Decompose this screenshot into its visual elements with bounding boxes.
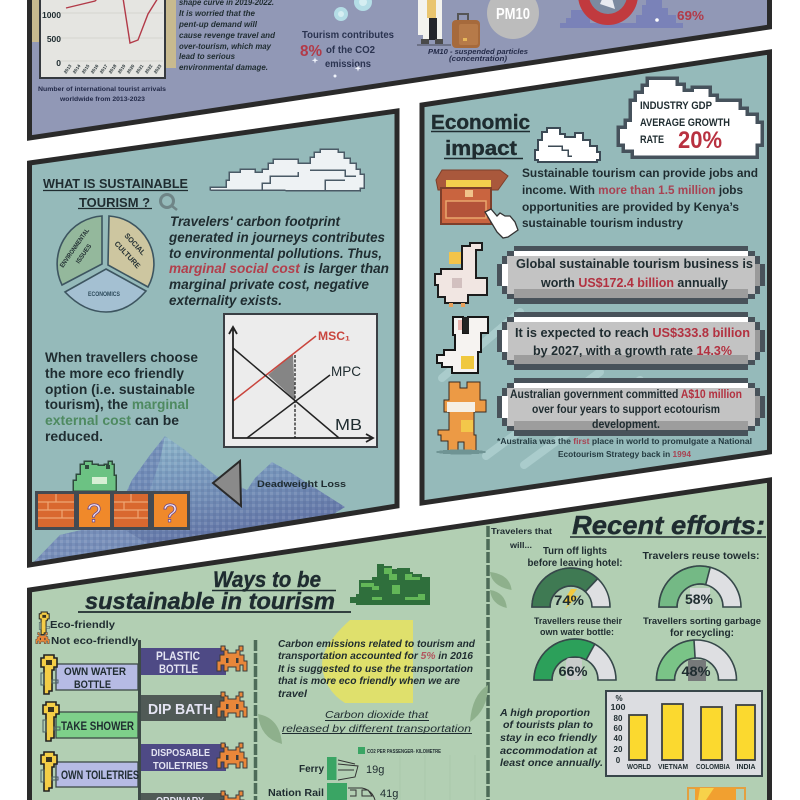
text: eco friendly accommodation bbox=[499, 707, 603, 769]
text: revenge travel warning: pent-up demand will bbox=[178, 19, 258, 29]
icon: green bush bbox=[350, 564, 430, 605]
heading: ways to be sustainable in tourism: Ways to be bbox=[213, 567, 321, 592]
heading: ways to be sustainable in tourism: sustainable in tourism bbox=[85, 588, 335, 614]
pie: environmental, social, economic pillars: CULTURE bbox=[113, 239, 142, 270]
icon: pixel rabbit bbox=[437, 317, 488, 373]
line chart: international tourist arrivals: 1000 bbox=[42, 10, 61, 20]
gauge: turn off lights 74 percent: Turn off lights bbox=[543, 546, 607, 557]
PM10 circle bbox=[487, 0, 539, 39]
text: carbon footprint explanation: generated in journeys contributes bbox=[168, 230, 385, 245]
panel: economic impact bbox=[422, 52, 770, 503]
pill: expected growth: by 2027, with a growth rate 14.3% bbox=[533, 343, 732, 358]
pill: global business worth: Global sustainable tourism business is bbox=[516, 257, 753, 271]
chart title: carbon dioxide by transportation: Carbon dioxide that bbox=[325, 709, 429, 721]
pill: global business worth bbox=[497, 246, 765, 304]
heading bbox=[431, 112, 530, 160]
PM10 caption: (concentration) bbox=[449, 54, 508, 63]
panel: ways to be sustainable and recent efforts bbox=[30, 480, 770, 800]
text: eco friendly accommodation: of tourists plan to bbox=[503, 719, 594, 731]
gauge: turn off lights 74 percent: 74% bbox=[554, 592, 585, 608]
gauge: reuse water bottle 66 percent: own water bottle: bbox=[540, 627, 614, 638]
stat: tourism contributes 8 percent of CO2: Tourism contributes bbox=[302, 30, 394, 41]
icon: magnifier bbox=[160, 194, 177, 210]
bar chart: plan to stay in eco accommodation by country: 80 bbox=[614, 714, 623, 723]
chart: deadweight loss supply and demand: MSC₁ bbox=[318, 329, 350, 343]
text: revenge travel warning bbox=[178, 0, 276, 72]
heading: recent efforts: Recent efforts: bbox=[572, 510, 765, 540]
text: revenge travel warning: environmental damage. bbox=[179, 62, 268, 72]
line chart: international tourist arrivals: 2021 bbox=[135, 63, 145, 75]
callout: industry GDP growth rate: RATE bbox=[640, 134, 664, 146]
bar chart: plan to stay in eco accommodation by country: 60 bbox=[614, 724, 623, 733]
icon: leaves bbox=[258, 572, 512, 744]
text: eco friendly option: option (i.e. sustainable bbox=[45, 382, 196, 397]
PM10 caption: PM10 - suspended particles bbox=[428, 47, 528, 56]
icon: pixel fox bbox=[436, 382, 486, 454]
line chart: international tourist arrivals: 500 bbox=[47, 34, 61, 44]
bar chart: CO2 per passenger kilometre: CO2 PER PASSENGER- KILOMETRE bbox=[367, 749, 442, 755]
bar chart: plan to stay in eco accommodation by country: 20 bbox=[614, 745, 623, 754]
line chart: international tourist arrivals: 2019 bbox=[117, 63, 127, 75]
donut chart on mountains: 69 percent: 69% bbox=[677, 8, 704, 23]
callout: industry GDP growth rate: 20% bbox=[678, 127, 722, 154]
icon: sparkles bbox=[312, 57, 362, 78]
text: eco friendly option: tourism), the marginal bbox=[45, 397, 189, 412]
label: travelers that will: will... bbox=[509, 540, 532, 550]
bricks and question blocks: ? bbox=[87, 498, 101, 528]
footnote: Australia national ecotourism strategy bbox=[497, 436, 752, 459]
pie: environmental, social, economic pillars: ENVIRONMENTAL bbox=[59, 227, 91, 269]
line chart: international tourist arrivals: 2013 bbox=[63, 63, 73, 75]
pie: environmental, social, economic pillars bbox=[57, 216, 154, 312]
text: eco friendly option: external cost can be bbox=[45, 413, 179, 428]
text: jobs and income bbox=[522, 168, 758, 230]
eco option: own water bottle: OWN WATER bbox=[64, 666, 126, 678]
bar chart: plan to stay in eco accommodation by country: 0 bbox=[616, 756, 621, 765]
line chart: international tourist arrivals: 2020 bbox=[126, 63, 136, 75]
text: jobs and income: Sustainable tourism can provide jobs and bbox=[522, 168, 758, 180]
pill: expected growth: It is expected to reach US$333.8 billion bbox=[515, 325, 750, 340]
chart caption bbox=[38, 86, 167, 103]
bar chart: plan to stay in eco accommodation by country: WORLD bbox=[627, 762, 651, 771]
label: deadweight loss: Deadweight Loss bbox=[257, 479, 346, 490]
pill: Australian government commitment: development. bbox=[592, 419, 660, 431]
icon: trophy bbox=[688, 788, 745, 800]
gauge: reuse water bottle 66 percent: Travellers reuse their bbox=[534, 616, 622, 627]
bar chart: CO2 per passenger kilometre: Ferry bbox=[299, 763, 324, 775]
icon: pixel frog bbox=[73, 461, 116, 491]
icon: bubbles bbox=[334, 0, 372, 21]
icon: treasure chest bbox=[436, 170, 508, 224]
stat: tourism contributes 8 percent of CO2: 8% bbox=[300, 43, 322, 60]
bar chart: CO2 per passenger kilometre bbox=[268, 747, 475, 800]
chart: deadweight loss supply and demand: MPC bbox=[331, 363, 361, 379]
gauge: sorting garbage 48 percent: for recycling: bbox=[670, 628, 734, 639]
pie: environmental, social, economic pillars: ECONOMICS bbox=[88, 291, 121, 298]
PM10 circle: PM10 bbox=[496, 6, 530, 23]
text: carbon emissions related to tourism: transportation accounted for 5% in 2016 bbox=[278, 651, 473, 662]
mountains background bbox=[30, 436, 345, 570]
heading bbox=[43, 176, 188, 210]
callout: industry GDP growth rate bbox=[618, 78, 762, 157]
pill: Australian government commitment bbox=[497, 378, 765, 436]
text: carbon emissions related to tourism: Carbon emissions related to tourism and bbox=[278, 639, 476, 650]
text: carbon emissions related to tourism: that is more eco friendly when we are bbox=[278, 676, 460, 687]
pill: Australian government commitment: over four years to support ecotourism bbox=[532, 404, 720, 416]
chart: deadweight loss supply and demand bbox=[224, 314, 377, 447]
chart title: carbon dioxide by transportation: released by different transportation bbox=[282, 723, 471, 735]
pie: environmental, social, economic pillars: ISSUES bbox=[75, 243, 94, 265]
tan backdrop behind chart bbox=[32, 0, 176, 68]
text: eco friendly accommodation: least once annually. bbox=[500, 757, 603, 769]
bar chart: plan to stay in eco accommodation by country: COLOMBIA bbox=[696, 762, 730, 771]
bar chart: CO2 per passenger kilometre: 19g bbox=[366, 764, 384, 776]
arrow: deadweight loss pointer bbox=[213, 461, 241, 506]
heading: ways to be sustainable in tourism bbox=[78, 567, 351, 614]
icon: pointing hand bbox=[485, 209, 518, 238]
line chart: international tourist arrivals: 0 bbox=[56, 58, 61, 68]
footnote: Australia national ecotourism strategy: *Australia was the first place in world to promulgate a National bbox=[497, 436, 752, 446]
bar chart: plan to stay in eco accommodation by country: INDIA bbox=[736, 762, 756, 771]
bar chart: plan to stay in eco accommodation by country: % bbox=[615, 694, 623, 703]
text: carbon footprint explanation: marginal private cost, negative bbox=[169, 277, 369, 292]
gauge: sorting garbage 48 percent: Travellers sorting garbage bbox=[643, 616, 761, 627]
text: carbon footprint explanation bbox=[168, 214, 389, 308]
panel: tourism impact on the environment bbox=[30, 0, 770, 138]
gauge: sorting garbage 48 percent: 48% bbox=[682, 663, 711, 679]
text: jobs and income: opportunities are provided by Kenya’s bbox=[522, 202, 739, 214]
stat: tourism contributes 8 percent of CO2: of the CO2 bbox=[326, 45, 375, 56]
text: revenge travel warning: over-tourism, which may bbox=[179, 41, 272, 51]
decorative light stripes bbox=[442, 312, 640, 465]
text: carbon footprint explanation: marginal social cost is larger than bbox=[169, 261, 389, 276]
eco option: own water bottle: BOTTLE bbox=[74, 679, 111, 691]
text: carbon emissions related to tourism: It is suggested to use the transportation bbox=[278, 664, 473, 675]
text: eco friendly option: When travellers choose bbox=[45, 350, 198, 365]
callout: industry GDP growth rate: AVERAGE GROWTH bbox=[640, 117, 730, 129]
chart title: carbon dioxide by transportation bbox=[282, 709, 472, 735]
text: eco friendly option bbox=[45, 350, 198, 444]
text: eco friendly accommodation: A high proportion bbox=[499, 707, 590, 719]
eco option: take shower: TAKE SHOWER bbox=[61, 719, 134, 733]
text: jobs and income: income. With more than 1.5 million jobs bbox=[522, 185, 743, 197]
stat: tourism contributes 8 percent of CO2: emissions bbox=[325, 59, 371, 70]
bricks and question blocks bbox=[35, 491, 190, 530]
not eco option: ordinary bbox=[141, 791, 247, 800]
not eco option: plastic bottle bbox=[141, 646, 247, 676]
bricks and question blocks: ? bbox=[163, 498, 177, 528]
pill: global business worth: worth US$172.4 billion annually bbox=[540, 276, 728, 290]
bar chart: plan to stay in eco accommodation by country bbox=[606, 691, 762, 776]
text: carbon footprint explanation: externality exists. bbox=[169, 293, 282, 308]
text: eco friendly option: reduced. bbox=[45, 429, 103, 444]
text: carbon footprint explanation: Travelers' carbon footprint bbox=[170, 214, 340, 229]
heading: WHAT IS SUSTAINABLE bbox=[43, 176, 188, 191]
line chart: international tourist arrivals: 2023 bbox=[153, 63, 163, 75]
text: revenge travel warning: lead to serious bbox=[179, 51, 235, 61]
chart: deadweight loss supply and demand: MB bbox=[335, 417, 362, 434]
callout: industry GDP growth rate: INDUSTRY GDP bbox=[640, 100, 712, 112]
not eco option: disposable toiletries: TOILETRIES bbox=[153, 760, 208, 772]
line chart: international tourist arrivals: 2018 bbox=[108, 63, 118, 75]
gauge: reuse water bottle 66 percent bbox=[534, 616, 622, 680]
text: revenge travel warning: cause revenge travel and bbox=[179, 30, 276, 40]
text: eco friendly accommodation: accommodation at bbox=[500, 745, 598, 757]
heading: Economic bbox=[431, 112, 530, 134]
line chart: international tourist arrivals: 2022 bbox=[144, 63, 154, 75]
bar chart: plan to stay in eco accommodation by country: VIETNAM bbox=[658, 762, 688, 771]
text: jobs and income: sustainable tourism industry bbox=[522, 218, 684, 230]
line chart: international tourist arrivals bbox=[40, 0, 165, 78]
pill: expected growth bbox=[497, 312, 765, 370]
line chart: international tourist arrivals: 2017 bbox=[99, 63, 109, 75]
not eco option: plastic bottle: BOTTLE bbox=[159, 664, 198, 676]
stat: tourism contributes 8 percent of CO2 bbox=[300, 30, 394, 70]
chart caption: worldwide from 2013-2023 bbox=[59, 96, 146, 103]
heading: TOURISM ? bbox=[79, 195, 150, 210]
gauge: reuse towels 58 percent bbox=[642, 550, 760, 610]
footnote: Australia national ecotourism strategy: Ecotourism Strategy back in 1994 bbox=[558, 449, 691, 459]
legend: eco-friendly keys bbox=[36, 612, 138, 647]
gauge: reuse water bottle 66 percent: 66% bbox=[558, 663, 588, 679]
icon: scientist bbox=[417, 0, 451, 46]
PM10 caption bbox=[428, 47, 528, 63]
not eco option: dip bath: DIP BATH bbox=[148, 701, 213, 718]
bar chart: CO2 per passenger kilometre: 41g bbox=[380, 788, 398, 800]
bar chart: CO2 per passenger kilometre: Nation Rail bbox=[268, 787, 324, 799]
icon: pixel cloud bbox=[210, 149, 364, 191]
panel: what is sustainable tourism bbox=[30, 111, 397, 570]
legend: eco-friendly keys: Eco-friendly bbox=[50, 619, 115, 631]
not eco option: disposable toiletries: DISPOSABLE bbox=[151, 747, 210, 759]
bar chart: plan to stay in eco accommodation by country: 40 bbox=[614, 734, 623, 743]
gauge: reuse towels 58 percent: Travelers reuse towels: bbox=[642, 550, 760, 562]
pie: environmental, social, economic pillars: SOCIAL bbox=[123, 231, 148, 257]
text: carbon emissions related to tourism: travel bbox=[278, 689, 307, 700]
gauge: turn off lights 74 percent: before leaving hotel: bbox=[528, 558, 622, 569]
donut chart on mountains: 69 percent bbox=[560, 0, 704, 28]
text: eco friendly option: the more eco friendly bbox=[45, 366, 184, 381]
eco option: take shower bbox=[43, 702, 138, 741]
eco option: own toiletries bbox=[41, 752, 139, 791]
icon: pixel goose bbox=[435, 243, 487, 307]
line chart: international tourist arrivals: 2016 bbox=[90, 63, 100, 75]
line chart: international tourist arrivals: 2014 bbox=[72, 63, 82, 75]
text: revenge travel warning: It is worried that the bbox=[179, 8, 255, 18]
heading: impact bbox=[445, 138, 517, 160]
icon: small cloud bbox=[535, 128, 600, 162]
line chart: international tourist arrivals: 2015 bbox=[81, 63, 91, 75]
text: eco friendly accommodation: stay in eco friendly bbox=[500, 732, 598, 744]
gauge: reuse towels 58 percent: 58% bbox=[685, 591, 714, 607]
gauge: sorting garbage 48 percent bbox=[643, 616, 761, 681]
centre divider: eco vs not eco bbox=[138, 640, 141, 800]
text: carbon footprint explanation: to environmental pollutions. Thus, bbox=[169, 246, 382, 261]
gauge: turn off lights 74 percent bbox=[528, 546, 622, 609]
bar chart: plan to stay in eco accommodation by country: 100 bbox=[610, 703, 626, 712]
not eco option: disposable toiletries bbox=[141, 743, 247, 772]
icon: suitcase bbox=[452, 14, 480, 48]
label: travelers that will bbox=[491, 526, 552, 550]
yellow backdrop bbox=[322, 620, 413, 703]
legend: eco-friendly keys: Not eco-friendly bbox=[51, 635, 138, 647]
not eco option: plastic bottle: PLASTIC bbox=[156, 651, 200, 663]
pill: Australian government commitment: Australian government committed A$10 million bbox=[510, 389, 742, 401]
not eco option: dip bath bbox=[141, 692, 247, 721]
eco option: own water bottle bbox=[41, 655, 138, 694]
text: carbon emissions related to tourism bbox=[278, 639, 476, 700]
eco option: own toiletries: OWN TOILETRIES bbox=[61, 768, 139, 782]
label: travelers that will: Travelers that bbox=[491, 526, 552, 536]
chart caption: Number of international tourist arrivals bbox=[38, 86, 167, 93]
